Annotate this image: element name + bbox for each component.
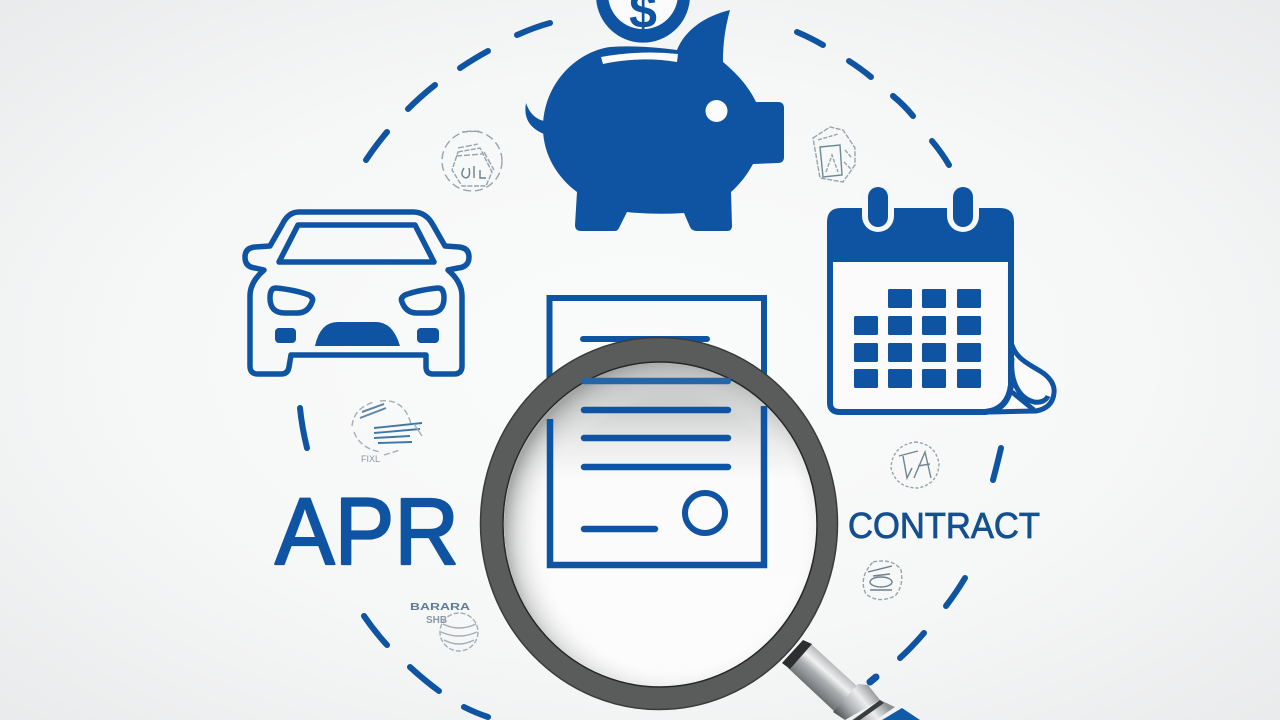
lens	[503, 362, 817, 687]
grille	[315, 322, 400, 346]
metal ring	[480, 338, 838, 710]
handle	[782, 640, 920, 720]
lens edge shading	[504, 363, 816, 686]
pig body	[543, 10, 784, 231]
sketch icon: left banknotes	[352, 401, 422, 464]
dashed circle ring	[300, 23, 1001, 717]
sketch icon: lower left coins with caption	[410, 602, 478, 651]
icon: car front	[245, 212, 469, 374]
page curl	[990, 345, 1054, 412]
icon: contract document	[550, 298, 764, 565]
sketch caption: FIXL	[361, 454, 380, 464]
left headlight	[270, 288, 313, 313]
coin slot	[601, 53, 678, 64]
sketch icon: top right document	[813, 127, 855, 182]
sketch icon: lower right scribble badge	[863, 561, 902, 600]
coin	[596, 0, 690, 43]
binder rings	[862, 180, 979, 232]
sketch caption: SHB	[426, 615, 447, 626]
windshield	[279, 225, 434, 262]
car outline	[245, 212, 469, 374]
sketch icon: right scribble badge	[891, 442, 939, 488]
right headlight	[401, 288, 444, 313]
sketch caption: BARARA	[410, 602, 470, 613]
label: APR: APR	[275, 479, 459, 585]
magnified document lines	[550, 381, 764, 565]
date grid	[854, 289, 981, 388]
icon: piggy bank with coin	[525, 0, 784, 231]
magnifying glass	[480, 338, 920, 720]
calendar page	[830, 240, 1011, 412]
left fog lamp	[275, 328, 296, 343]
icon: calendar	[827, 180, 1054, 412]
label: CONTRACT: CONTRACT	[848, 505, 1040, 546]
right fog lamp	[417, 328, 439, 343]
sketch icon: top left jar	[442, 131, 502, 191]
pig eye	[706, 100, 728, 122]
calendar header	[827, 208, 1014, 262]
pig tail	[525, 103, 544, 134]
